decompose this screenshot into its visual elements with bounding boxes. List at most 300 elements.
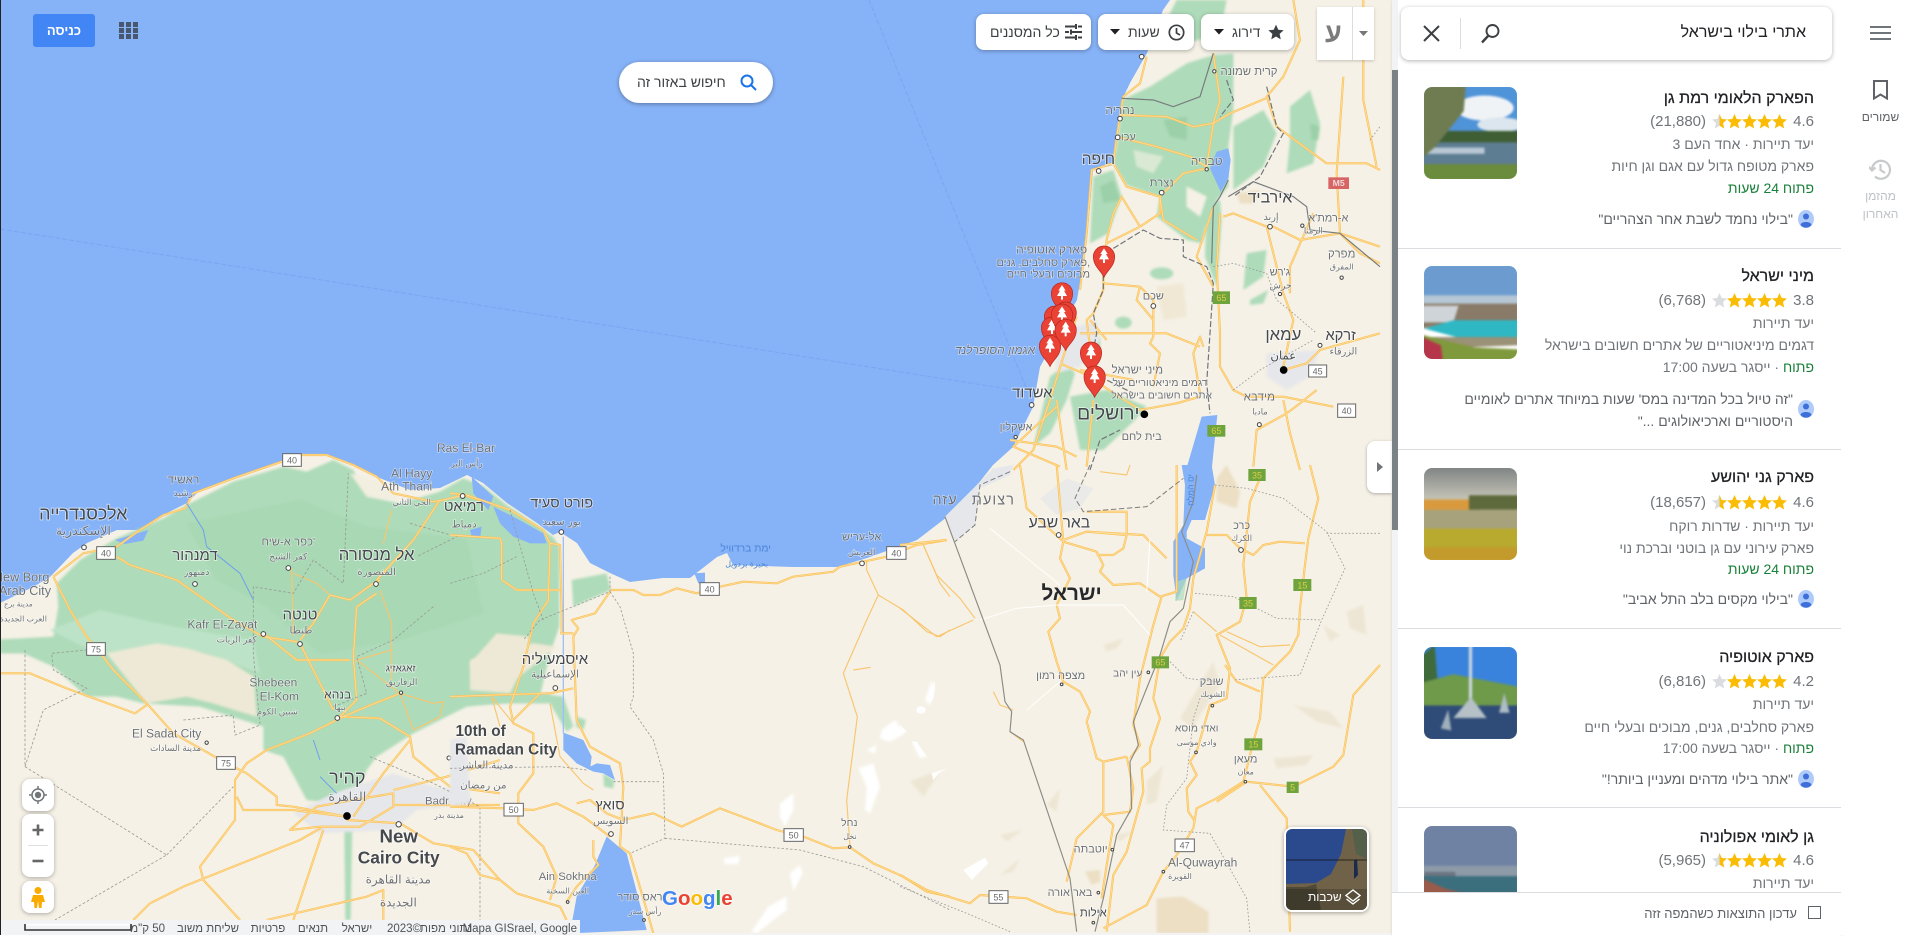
rating row [1658, 852, 1814, 869]
Egypt city labels: בנהא [324, 687, 351, 701]
sand patches near Ismailia [470, 633, 530, 693]
Negev road shields: 47 [1180, 841, 1190, 851]
locate me button [22, 779, 54, 811]
northern city labels: אירביד [1248, 190, 1292, 207]
language input toggle: ע [1325, 18, 1342, 48]
northern road shields: 40 [1342, 406, 1352, 416]
attribution bar: 50 ק"מ [130, 923, 165, 935]
search query text: אתרי בילוי בישראל [1681, 24, 1806, 41]
photo: turquoise pool [1424, 266, 1517, 359]
Lake Manzala channels [470, 477, 547, 543]
northern city labels: אשדוד [1012, 384, 1053, 401]
saved label: שמורים [1862, 110, 1899, 124]
result: Apollonia National Park [1424, 826, 1814, 892]
place labels [955, 242, 1213, 401]
northern city labels: עמאן [1265, 325, 1301, 344]
icon: search [740, 74, 757, 91]
Negev labels: באר שבע [1029, 515, 1090, 532]
Negev white minor roads [980, 528, 1150, 710]
northern city labels: שכם [1143, 290, 1164, 302]
result: Utopia Park [1424, 647, 1814, 788]
northern road shields: 45 [1313, 366, 1323, 376]
left edge line [0, 0, 1, 935]
northern roads [1010, 0, 1380, 470]
northern solid borders [1122, 53, 1380, 267]
Nile branches [187, 503, 337, 793]
northern city labels: المفرق [1330, 262, 1354, 271]
northern city labels: עכו [1121, 132, 1136, 144]
review snippet: "בילוי נחמד לשבת אחר הצהריים" [1598, 211, 1793, 227]
icon: star [1268, 24, 1284, 40]
side navigation rail [1841, 0, 1920, 935]
Negev city markers [1056, 533, 1247, 924]
northern road shields: M5 [1333, 178, 1345, 188]
northern city labels: مادبا [1252, 406, 1268, 416]
Egypt city labels: دمنهور [183, 567, 209, 577]
Egypt-Israel border [945, 517, 1077, 932]
Egypt city labels: Badr City [425, 796, 472, 808]
result: Ramat Gan National Park [1424, 87, 1814, 228]
Cairo and city markers [82, 494, 465, 827]
Sinai and canal labels: נחל [841, 817, 857, 829]
Sinai and canal labels: ראס סודר [617, 892, 663, 904]
place labels: אתרים חשובים בישראל [1111, 389, 1213, 401]
recent label: האחרון [1863, 207, 1898, 221]
description: פארק מטופח גדול עם אגם וגן חיות [1612, 158, 1814, 174]
Egypt city labels: بنها [334, 702, 346, 712]
northern city labels: ג'רש [1270, 266, 1291, 278]
rating row [1650, 494, 1814, 511]
Negev labels: כרכ [1233, 520, 1250, 532]
icon: dropdown arrow [1359, 31, 1368, 36]
Egypt city labels: مدينة بدر [433, 811, 464, 820]
Negev labels: שובק [1200, 676, 1224, 688]
photo: lake at dusk [1424, 468, 1517, 560]
Negev labels [932, 474, 1257, 920]
attribution bar: תנאים [298, 923, 328, 935]
sea [0, 0, 1392, 935]
northern road shields: 65 [1211, 426, 1221, 436]
Negev road shields [989, 469, 1311, 903]
Sinai road shields: 40 [891, 548, 901, 558]
Sinai road shields [504, 547, 906, 841]
filter chip: rating [1201, 14, 1294, 50]
Sinai roads [450, 493, 950, 933]
place name: הפארק הלאומי רמת גן [1664, 90, 1814, 107]
Egypt city labels: Ath Thani [381, 480, 432, 494]
attribution bar: שליחת משוב [177, 922, 239, 935]
review snippet: "זה טיול בכל המדינה במס' שעות במיוחד אתרים לאומיים [1464, 391, 1793, 407]
Egypt city labels: كفر الشيخ [269, 551, 308, 561]
attribution bar: Mapa GISrael, Google [463, 923, 577, 935]
Egypt city labels: Ras El-Bar [437, 441, 495, 455]
Sinai and canal labels: פורט סעיד [530, 495, 593, 511]
Egypt city labels: El-Kom [260, 690, 299, 704]
northern city labels: א-רמת'א [1308, 213, 1349, 225]
Sinai and canal labels: بور سعيد [543, 517, 581, 528]
northern city labels [1000, 66, 1357, 443]
Sinai road shields: 40 [705, 584, 715, 594]
Egypt city labels: אלכסנדרייה [39, 503, 128, 523]
Bitter lakes and Gulf of Suez [563, 573, 705, 933]
Negev road shields: 65 [1155, 658, 1165, 668]
Negev road shields: 15 [1248, 740, 1258, 750]
Negev labels: ואדי מוסא [1175, 724, 1218, 735]
Egypt city labels: טנטה [283, 606, 317, 623]
northern city labels: טבריה [1191, 154, 1223, 168]
Negev labels: ים המלח [1185, 474, 1195, 506]
northern city labels: מידבא [1244, 391, 1275, 404]
Sinai and canal labels: 10th of [456, 723, 507, 740]
Sinai city markers [460, 494, 864, 921]
Sinai and canal labels: סואץ [595, 797, 625, 813]
Egypt city labels: Kafr El-Zayat [187, 617, 258, 631]
rating row: 4.6 [1793, 852, 1814, 869]
Egypt city labels: رأس البر [450, 458, 483, 469]
Negev labels: معان [1237, 767, 1254, 776]
Negev labels: מצפה רמון [1036, 670, 1085, 682]
Nile delta vegetation [0, 460, 559, 920]
northern vegetation [1033, 0, 1320, 450]
Negev labels: Al-Quwayrah [1168, 856, 1237, 870]
northern city labels: إربد [1263, 212, 1279, 223]
rating row: (6,816) [1658, 673, 1706, 690]
satellite layer tile [1284, 827, 1369, 912]
Negev roads [900, 465, 1380, 932]
Egypt city labels: المنصورة [357, 567, 396, 578]
place labels: פארק אוטופיה [1016, 242, 1087, 256]
Negev and southern Jordan map layer [900, 465, 1380, 933]
filter chip: hours [1098, 14, 1194, 50]
recent label [1863, 189, 1898, 221]
Sinai and canal labels: من رمضان [460, 780, 507, 791]
rating row: 4.6 [1793, 494, 1814, 511]
satellite layer tile: שכבות [1308, 890, 1342, 904]
Negev labels: الشوبك [1200, 690, 1225, 699]
Egypt city labels: الجديدة [380, 896, 417, 910]
attribution bar: 2023© [387, 923, 422, 935]
icon: saved bookmark [1873, 80, 1888, 100]
northern city markers [1014, 54, 1343, 439]
icon: reviewer avatar [1798, 590, 1814, 608]
Negev road shields: 35 [1252, 470, 1262, 480]
Egypt city labels: זאגאזיג [386, 664, 416, 675]
Egypt city labels: דמנהור [172, 547, 218, 564]
Sinai and canal labels: ימת ברדוויל [720, 543, 771, 555]
northern city labels: מפרק [1328, 248, 1355, 260]
Sinai and canal labels: العين السخنة [546, 886, 589, 895]
land mass [0, 0, 1392, 935]
Negev labels: القويرة [1168, 872, 1192, 881]
Egypt city labels: Shebeen [249, 676, 297, 690]
Egypt city labels: مدينة برج [4, 600, 33, 609]
Egypt city labels: Cairo City [358, 847, 440, 867]
icon: menu [1870, 26, 1891, 40]
photo: fountain [1424, 647, 1517, 739]
description: דגמים מיניאטוריים של אתרים חשובים בישראל [1545, 337, 1814, 353]
northern city labels: الزرقاء [1329, 346, 1357, 357]
scrollbar [1392, 0, 1398, 935]
Sinai and canal labels: رأس سدر [628, 906, 662, 916]
Gaza and West Bank dashed lines [955, 465, 1183, 542]
northern city labels: جرش [1270, 280, 1292, 290]
Egypt roads [0, 455, 500, 920]
Egypt city labels: شبين الكوم [257, 706, 298, 716]
filter chip: rating: דירוג [1232, 24, 1260, 40]
canal side vegetation [450, 573, 614, 788]
rating row [1658, 673, 1814, 690]
language input toggle [1317, 7, 1374, 60]
Negev labels: מעאן [1234, 754, 1257, 766]
photo: lake and tree [1424, 87, 1517, 179]
Egypt minor roads [292, 510, 443, 730]
result map pins [1039, 246, 1115, 397]
Sinai and canal labels: الإسماعيلية [531, 669, 579, 680]
Ismailia side urban patch [450, 737, 470, 807]
desert sand patches [910, 465, 1367, 933]
search this area pill [619, 62, 773, 103]
icon: search [1481, 24, 1500, 44]
sign in button: כניסה [47, 23, 81, 38]
Sinai road shields: 50 [789, 830, 799, 840]
Egypt city labels: Arab City [0, 584, 52, 598]
light breaks in vegetation [1187, 187, 1207, 217]
search box [1401, 7, 1832, 60]
Jordan dotted boundaries [900, 485, 1380, 933]
place labels: מבוכים ובעלי חיים [1007, 268, 1090, 281]
Sinai and canal labels: نخل [843, 832, 857, 841]
place labels: מיני ישראל [1112, 363, 1163, 376]
Egypt city labels: العرب الجديدة [0, 615, 47, 624]
update results footer [1392, 892, 1841, 936]
Negev road shields: 35 [1243, 598, 1253, 608]
northern city labels: عمان [1270, 349, 1296, 362]
attribution bar [0, 920, 580, 935]
icon: dropdown arrow [1214, 29, 1224, 34]
Lake Burullus [115, 530, 148, 544]
greater Cairo urban area [293, 773, 473, 833]
Egypt city labels: مدينة القاهرة [366, 872, 431, 887]
Egypt city labels: El Sadat City [132, 727, 201, 741]
Egypt city labels: دمياط [451, 519, 477, 530]
category: יעד תיירות [1753, 315, 1814, 331]
northern city labels: נצרת [1150, 178, 1174, 190]
northern city labels: קרית שמונה [1220, 66, 1278, 78]
northern road shields [1207, 177, 1356, 437]
place labels: אגמון הסופרלנד [955, 343, 1036, 357]
category: יעד תיירות · אחד העם 3 [1673, 136, 1814, 152]
Sinai and canal labels [455, 495, 881, 916]
Negev road shields: 15 [1297, 580, 1307, 590]
zoom control [22, 814, 54, 877]
recent label: מהזמן [1865, 189, 1896, 203]
Gaza urban area [945, 465, 1013, 542]
Egypt city labels: כפר א-שיח' [262, 537, 315, 549]
northern road shields: 65 [1216, 293, 1226, 303]
rating row: 4.6 [1793, 113, 1814, 130]
Negev labels: באר אורה [1048, 887, 1093, 899]
Sinai and canal labels: Ramadan City [455, 741, 558, 758]
rating row: 4.2 [1793, 673, 1814, 690]
opening hours: פתוח · ייסגר בשעה 17:00 [1663, 740, 1814, 756]
results panel [1392, 0, 1841, 935]
icon: clock [1168, 24, 1185, 40]
Negev labels: ישראל [1042, 582, 1102, 605]
checkbox [1808, 906, 1821, 919]
place name: פארק אוטופיה [1719, 649, 1814, 666]
opening hours: פתוח 24 שעות [1728, 180, 1814, 196]
review snippet: "אתר בילוי מדהים ומעניין ביותר!" [1602, 771, 1793, 787]
Sinai and canal labels: بحيرة بردويل [725, 560, 768, 569]
Egypt city labels: קהיר [329, 767, 365, 787]
desert white patches [900, 680, 988, 880]
Negev labels: עזה [932, 492, 958, 508]
rating row: (18,657) [1650, 494, 1706, 511]
Egypt city labels: الإسكندرية [56, 524, 111, 539]
Google logo: Google [662, 887, 733, 910]
Israel-Jordan border [1095, 475, 1197, 932]
Sinai and canal labels: איסמעיליה [522, 651, 589, 668]
Negev labels: עין יהב [1113, 669, 1142, 680]
Egypt city labels: ראשיד [167, 472, 199, 486]
northern city labels: זרקא [1325, 328, 1356, 344]
icon: reviewer avatar [1798, 210, 1814, 228]
Egypt road shields [87, 454, 301, 769]
northern dashed borders [1090, 80, 1283, 470]
Negev labels: אילות [1080, 907, 1107, 920]
review snippet: "בילוי מקסים בלב התל אביב" [1623, 591, 1793, 607]
northern city labels: אשקלון [1000, 421, 1032, 434]
Sinai and canal labels: العريش [848, 547, 875, 557]
footer label: עדכון התוצאות כשהמפה זזה [1644, 906, 1797, 921]
icon: reviewer avatar [1798, 400, 1814, 418]
place labels: דגמים מיניאטוריים של [1113, 377, 1208, 389]
Egypt city labels: الزقازيق [386, 677, 417, 687]
Egypt dotted borders [25, 473, 480, 920]
icon: layers [1345, 889, 1361, 905]
category: יעד תיירות [1753, 875, 1814, 891]
icon: close [1423, 25, 1440, 42]
search this area pill: חיפוש באזור זה [637, 74, 726, 90]
description: פארק סחלבים, גנים, מבוכים ובעלי חיים [1584, 719, 1814, 735]
sign in button [33, 14, 95, 47]
photo: sea view [1424, 826, 1517, 892]
Egypt city labels: الحي الثاني [392, 497, 431, 507]
Egypt city labels: Al Hayy [391, 467, 432, 481]
icon: recent history [1869, 160, 1892, 180]
icon: reviewer avatar [1798, 770, 1814, 788]
Sinai and canal labels: السويس [593, 816, 628, 827]
filter chip: all filters: כל המסננים [990, 24, 1060, 40]
attribution bar: ישראל [342, 922, 372, 935]
Sinai road shields: 50 [509, 805, 519, 815]
northern city labels: חיפה [1082, 151, 1115, 168]
Sinai minor roads [492, 545, 950, 847]
Egypt city labels: كفر الزيات [217, 635, 257, 645]
Egypt road shields: 40 [287, 456, 297, 466]
northern city labels: الرمثا [1304, 225, 1323, 235]
Jordan dotted boundaries [1213, 127, 1380, 390]
rating row: (6,768) [1658, 292, 1706, 309]
collapse panel tab [1367, 441, 1392, 493]
Tel Aviv and Amman urban areas [1057, 320, 1320, 390]
result: Ganei Yehoshua Park [1424, 468, 1814, 608]
map bottom edge [0, 933, 1392, 935]
attribution bar: נתוני מפות [420, 923, 472, 935]
rating row: (21,880) [1650, 113, 1706, 130]
Sinai and canal labels: Ain Sokhna [539, 871, 597, 883]
opening hours: פתוח · ייסגר בשעה 17:00 [1663, 359, 1814, 375]
review snippet: היסטוריים וארכיאולוגים ..." [1638, 413, 1793, 429]
category: יעד תיירות [1753, 696, 1814, 712]
desert white patches [723, 680, 935, 933]
category: יעד תיירות · שדרות רוקח [1669, 518, 1814, 534]
Dead Sea [1173, 465, 1215, 601]
icon: dropdown arrow [1110, 29, 1120, 34]
description: פארק עירוני עם גן בוטני וברכת נוי [1619, 540, 1814, 556]
Sinai dotted borders [450, 510, 950, 910]
filter chip: all filters [976, 14, 1091, 50]
filter chip: hours: שעות [1128, 24, 1160, 40]
rating row [1658, 292, 1814, 309]
Sinai and Suez map layer [450, 477, 950, 933]
tan hills [1157, 190, 1260, 320]
place name: גן לאומי אפולוניה [1700, 829, 1814, 846]
Sea of Galilee [1210, 148, 1231, 192]
maritime boundary lines [0, 0, 1027, 392]
Sinai and canal labels: مدينة العاشر [459, 760, 514, 771]
Negev labels: יוטבתה [1074, 844, 1108, 856]
attribution bar: פרטיות [251, 923, 285, 935]
Egypt road shields: 75 [221, 758, 231, 768]
Egypt city labels: דמיאט [444, 499, 484, 515]
Egypt road shields: 75 [91, 644, 101, 654]
Egypt city labels: مدينة السادات [150, 743, 201, 753]
Egypt city labels [0, 441, 495, 910]
Egypt city labels: القاهرة [328, 790, 366, 805]
rating row: (5,965) [1658, 852, 1706, 869]
result: Mini Israel [1424, 266, 1814, 429]
Egypt city labels: طنطا [290, 625, 312, 636]
Egypt city labels: New [379, 826, 418, 847]
place name: פארק גני יהושע [1711, 469, 1814, 486]
place name: מיני ישראל [1741, 268, 1814, 285]
northern Israel and Jordan map layer [955, 0, 1380, 470]
Negev minor roads [900, 465, 1290, 742]
Dead Sea north [1186, 415, 1217, 470]
Negev road shields: 55 [993, 892, 1003, 902]
rating row: 3.8 [1793, 292, 1814, 309]
Negev labels: רצועת [972, 492, 1015, 508]
review snippet [1464, 391, 1793, 429]
darker Galilee patches [1163, 117, 1187, 140]
rating row [1650, 113, 1814, 130]
Negev labels: وادي موسى [1177, 738, 1217, 747]
icon: apps grid [119, 22, 138, 39]
northern city labels: ירושלים [1077, 402, 1140, 424]
opening hours: פתוח 24 שעות [1728, 561, 1814, 577]
place labels: פארק סחלבים, גנים, [996, 256, 1090, 269]
street view pegman [22, 881, 54, 913]
Negev road shields: 5 [1290, 783, 1295, 793]
northern city labels: בית לחם [1122, 430, 1162, 443]
Egypt road shields: 40 [101, 548, 111, 558]
Egypt map layer: vegetation, water, roads, labels [0, 441, 559, 920]
Egypt city labels: אל מנסורה [339, 545, 415, 564]
delta sand patches [107, 643, 257, 717]
Sinai and canal labels: אל-עריש [842, 531, 881, 544]
Negev labels: الكرك [1231, 533, 1252, 543]
